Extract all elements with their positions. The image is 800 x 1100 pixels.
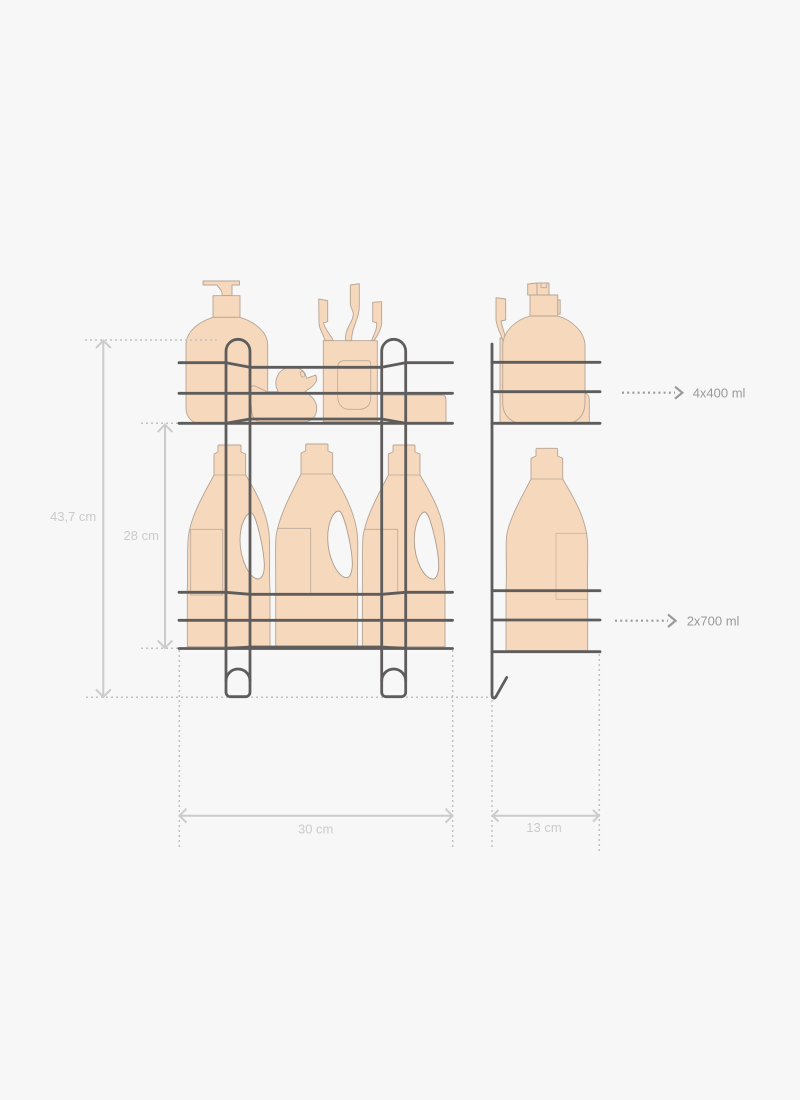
icon: soap dispenser bbox=[186, 281, 268, 423]
icon: soap bar bbox=[383, 395, 446, 423]
side view: detergent bottle bbox=[506, 448, 588, 651]
icon: toothbrushes bbox=[319, 284, 382, 341]
dimension: shelf spacing 28 cm: 28 cm bbox=[124, 528, 159, 543]
callout: 2x700 ml: 2x700 ml bbox=[687, 614, 740, 628]
dimension: depth 13 cm bbox=[492, 810, 599, 835]
icon: detergent bottle middle bbox=[276, 444, 358, 647]
icon: detergent bottle left bbox=[187, 445, 270, 647]
icon: detergent bottle right bbox=[362, 445, 445, 647]
dotted guide lines bbox=[85, 340, 599, 852]
front view: detergent bottles bbox=[187, 444, 445, 647]
front view: products on upper shelf bbox=[186, 281, 446, 423]
dimension: width 30 cm: 30 cm bbox=[298, 822, 333, 836]
dimension: overall height 43,7 cm: 43,7 cm bbox=[50, 509, 96, 524]
callout: 2x700 ml bbox=[615, 614, 740, 628]
icon: soap bottle side bbox=[503, 295, 585, 423]
icon: cup bbox=[323, 341, 377, 422]
callout: 4x400 ml: 4x400 ml bbox=[693, 386, 746, 400]
callout: 4x400 ml bbox=[622, 386, 746, 400]
icon: rubber duck bbox=[249, 367, 317, 422]
icon: pump and brushes side bbox=[528, 283, 560, 314]
front view: wire rack bbox=[179, 339, 452, 697]
dimension: overall height 43,7 cm bbox=[50, 340, 111, 697]
dimension: width 30 cm bbox=[180, 809, 452, 836]
side view: wire rack bbox=[492, 344, 600, 698]
side view: upper shelf products bbox=[496, 283, 589, 423]
icon: soap bar and cup behind bottle bbox=[500, 338, 589, 423]
dimension: shelf spacing 28 cm bbox=[124, 424, 172, 648]
dimension: depth 13 cm: 13 cm bbox=[526, 820, 562, 835]
icon: toothbrush side bbox=[496, 298, 506, 341]
